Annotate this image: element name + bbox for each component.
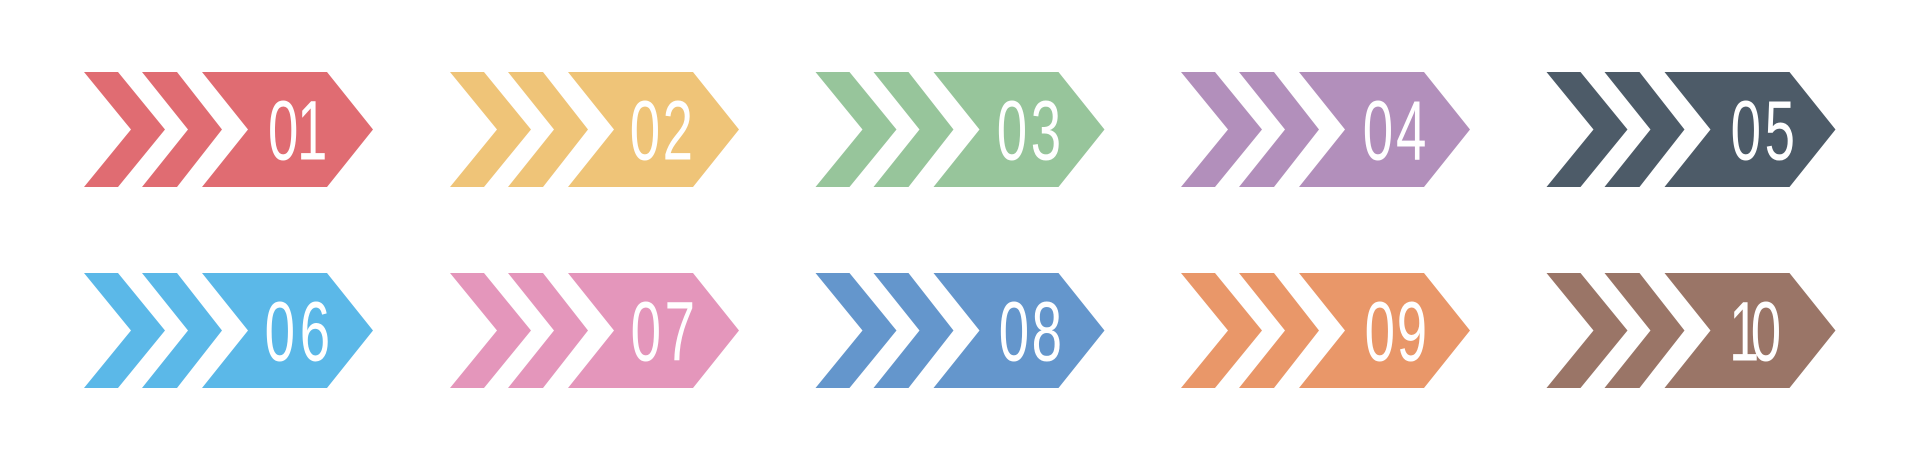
chevrons and arrow head 07 <box>450 273 739 388</box>
number 01: 01 <box>268 85 327 178</box>
arrow 03 <box>816 72 1104 187</box>
number 02: 02 <box>630 85 693 178</box>
number 04: 04 <box>1363 85 1426 178</box>
arrow 09 <box>1181 273 1470 388</box>
chevrons and arrow head 09 <box>1181 273 1470 388</box>
number 10: 10 <box>1729 286 1781 379</box>
arrow 08 <box>816 273 1104 388</box>
arrow 07 <box>450 273 739 388</box>
number 03: 03 <box>997 85 1061 178</box>
chevrons and arrow head 05 <box>1546 72 1836 187</box>
number 05: 05 <box>1731 85 1795 178</box>
chevrons and arrow head 02 <box>450 72 739 187</box>
chevrons and arrow head 10 <box>1546 273 1836 388</box>
number 08: 08 <box>999 286 1062 379</box>
arrow 05 <box>1546 72 1836 187</box>
chevrons and arrow head 01 <box>84 72 373 187</box>
chevrons and arrow head 04 <box>1181 72 1470 187</box>
arrow 10 <box>1546 273 1836 388</box>
number 06: 06 <box>265 286 330 379</box>
arrow 04 <box>1181 72 1470 187</box>
chevrons and arrow head 08 <box>816 273 1104 388</box>
chevrons and arrow head 06 <box>84 273 373 388</box>
number 07: 07 <box>631 286 695 379</box>
arrow 06 <box>84 273 373 388</box>
arrow 01 <box>84 72 373 187</box>
chevrons and arrow head 03 <box>816 72 1104 187</box>
arrow 02 <box>450 72 739 187</box>
number 09: 09 <box>1365 286 1427 379</box>
